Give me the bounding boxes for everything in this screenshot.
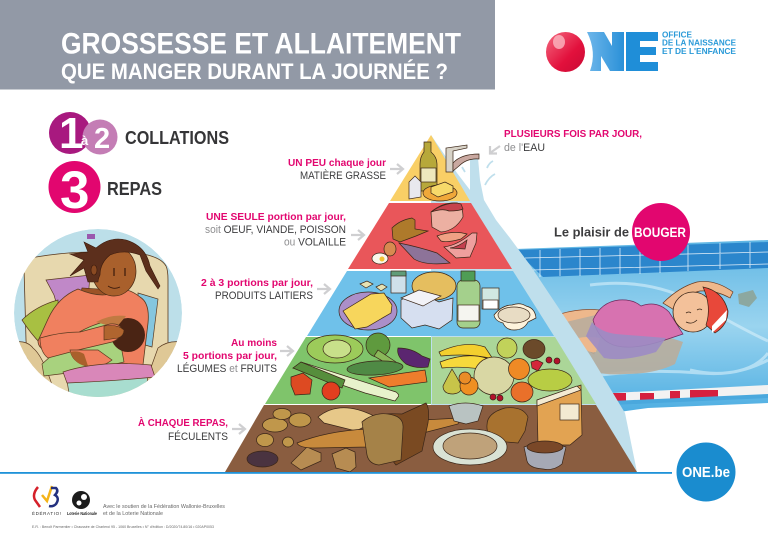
arrow: dairy [317,284,330,294]
label: vegetables and fruit: 5 portions par jour, [183,350,277,362]
collations badge: COLLATIONS [125,127,229,148]
collations badge: à [81,133,89,148]
label: exercise [554,203,690,261]
repas badge: 3 [60,161,89,220]
ONE logo: DE LA NAISSANCE [662,38,737,48]
label: water: PLUSIEURS FOIS PAR JOUR, [504,128,642,140]
lane rope [612,385,768,405]
label: dairy [201,277,313,302]
label: vegetables and fruit: Au moins [231,337,277,349]
label: water [504,128,642,154]
label: exercise: BOUGER [634,225,686,240]
water stream [431,135,637,472]
collations badge: 2 [94,123,110,155]
label: vegetables and fruit: LÉGUMES et FRUITS [177,362,277,375]
support text: et de la Loterie Nationale [103,511,163,517]
label: fats: MATIÈRE GRASSE [300,169,386,182]
food: meat and fish [372,203,477,264]
legal line: E.R. : Benoît Parmentier • Chaussée de Charleroi 95 - 1060 Bruxelles • N° d'édition : D/2020/74.80/16 • 020AP0053 [32,525,214,529]
food: dairy [339,271,536,330]
food: starches [247,385,582,472]
tier: dairy [307,271,554,336]
footer rule [0,472,672,474]
logo: Loterie Nationale: Loterie Nationale [67,511,97,516]
ONE.be badge [676,442,736,502]
label: dairy: 2 à 3 portions par jour, [201,277,313,289]
arrow: water [490,146,500,154]
support text [103,504,225,517]
label: protein [205,211,346,248]
label: fats: UN PEU chaque jour [288,157,386,169]
tier: starches [225,405,637,472]
label: starches: À CHAQUE REPAS, [138,416,228,429]
support text: Avec le soutien de la Fédération Wallonie-Bruxelles [103,504,225,510]
ONE.be badge: ONE.be [682,465,730,481]
arrow: starches [232,424,245,434]
label: protein: soit OEUF, VIANDE, POISSON [205,224,346,236]
tier: vegetables [265,337,431,404]
label: dairy: PRODUITS LAITIERS [215,290,313,302]
collations badge: 1 [59,109,83,158]
food: fruit [439,338,572,402]
swimmer [560,281,757,374]
logo: Fédération Wallonie-Bruxelles: ÉDÉRATIO! [32,510,61,516]
food: oil butter and tap [409,142,479,201]
pool illustration [515,240,768,413]
logo: Fédération Wallonie-Bruxelles [32,486,61,516]
header banner [0,0,495,90]
tier: fruit [432,337,596,404]
ONE logo: OFFICE [662,30,693,40]
arrow: protein [351,230,364,240]
ONE logo: ET DE L'ENFANCE [662,47,737,56]
arrow: fats [390,164,403,174]
label: exercise: Le plaisir de [554,226,629,240]
food pyramid [225,135,637,472]
arrow: vegetables and fruit [280,346,293,356]
food: vegetables [291,333,430,401]
label: protein: ou VOLAILLE [284,236,346,248]
title: GROSSESSE ET ALLAITEMENT [61,28,461,60]
tier: fats [390,135,470,201]
label: vegetables and fruit [177,337,277,375]
label: starches: FÉCULENTS [168,430,228,443]
label: water: de l'EAU [504,142,545,154]
subtitle: QUE MANGER DURANT LA JOURNÉE ? [61,59,448,84]
water splashes [462,161,495,185]
label: protein: UNE SEULE portion par jour, [206,211,346,223]
logo: Loterie Nationale [67,491,97,516]
tier: protein [348,203,512,269]
collations badge [49,109,229,158]
label: fats [288,157,386,182]
repas badge [48,161,162,220]
repas badge: REPAS [107,178,162,199]
label: starches [138,416,228,443]
illustration: breastfeeding mother [13,229,182,400]
ONE logo [546,30,737,72]
